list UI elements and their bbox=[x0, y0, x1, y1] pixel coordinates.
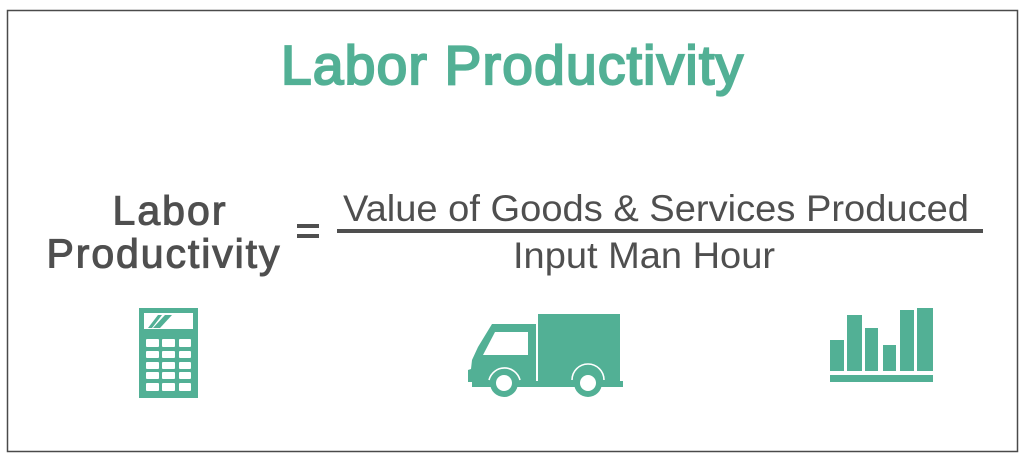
fraction bar bbox=[337, 229, 983, 233]
denominator: Input Man Hour bbox=[513, 235, 775, 276]
numerator: Value of Goods & Services Produced bbox=[343, 188, 969, 229]
equals sign bbox=[297, 224, 319, 238]
formula left-hand side: Labor bbox=[112, 188, 226, 234]
icon: bar chart bbox=[830, 308, 933, 382]
formula left-hand side: Productivity bbox=[46, 230, 280, 276]
title: Labor Productivity bbox=[281, 34, 744, 96]
icon: delivery truck bbox=[468, 314, 623, 397]
formula left-hand side bbox=[46, 188, 280, 276]
icon: calculator bbox=[139, 308, 198, 398]
